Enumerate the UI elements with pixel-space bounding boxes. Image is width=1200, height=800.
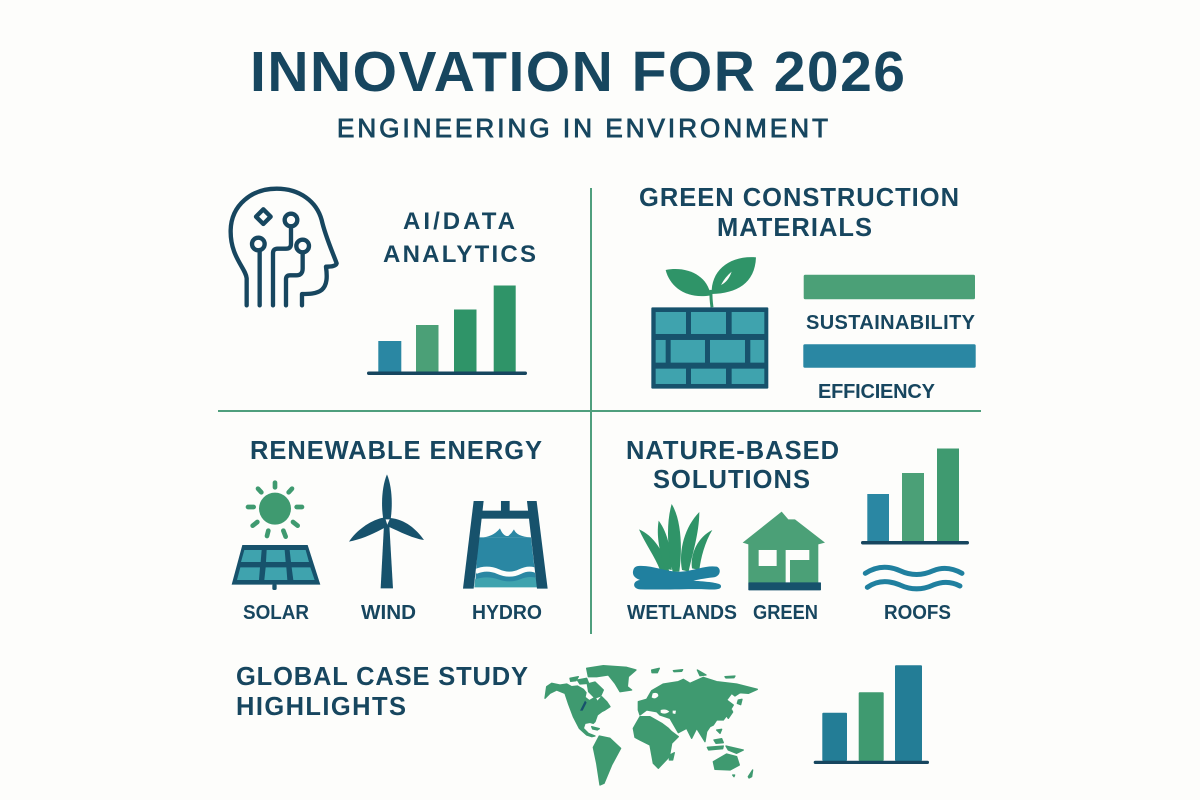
bar: sustainability [804,275,976,334]
heading: AI/Data Analytics [383,208,536,268]
label: green: GREEN [753,602,818,624]
heading: AI/Data Analytics: ANALYTICS [383,241,536,268]
heading: Green Construction Materials: GREEN CONSTRUCTION [639,184,959,212]
label: solar: SOLAR [243,602,310,624]
icon: green roof house [743,512,825,590]
heading: Global Case Study Highlights: HIGHLIGHTS [236,693,406,721]
bar chart: rising analytics [367,286,527,375]
icon: brick wall with sprout [651,257,768,389]
heading: Nature-Based Solutions: NATURE-BASED [626,437,839,465]
bar: efficiency: EFFICIENCY [818,381,936,403]
heading: AI/Data Analytics: AI/DATA [403,208,515,235]
heading: Green Construction Materials: MATERIALS [717,214,872,242]
icon: wetlands [633,504,721,590]
bar chart: case study results [814,665,929,764]
heading: Nature-Based Solutions: SOLUTIONS [653,466,810,494]
icon: wind turbine [349,474,424,588]
label: wind: WIND [361,602,416,624]
subtitle: ENGINEERING IN ENVIRONMENT [337,113,828,143]
icon: solar panel with sun [232,483,320,590]
icon: head with circuits [231,189,337,305]
bar chart: nature-based impact [861,448,969,544]
bar: sustainability: SUSTAINABILITY [806,312,976,334]
bar: efficiency [803,344,976,403]
heading: Global Case Study Highlights [236,663,528,721]
heading: Green Construction Materials [639,184,959,242]
label: roofs: ROOFS [884,602,951,624]
icon: water waves [865,567,962,589]
title: INNOVATION FOR 2026 [250,40,905,104]
label: hydro: HYDRO [472,602,542,624]
panel: global case study highlights [236,663,929,785]
heading: Global Case Study Highlights: GLOBAL CASE STUDY [236,663,528,691]
panel: AI/data analytics [231,189,536,375]
heading: Nature-Based Solutions [626,437,839,494]
panel: green construction materials [639,184,976,403]
label: wetlands: WETLANDS [627,602,737,624]
panel: nature-based solutions [626,437,969,624]
world map [545,666,757,785]
panel: renewable energy [232,437,548,624]
heading: Renewable Energy: RENEWABLE ENERGY [250,437,542,465]
icon: hydro dam [463,501,548,589]
